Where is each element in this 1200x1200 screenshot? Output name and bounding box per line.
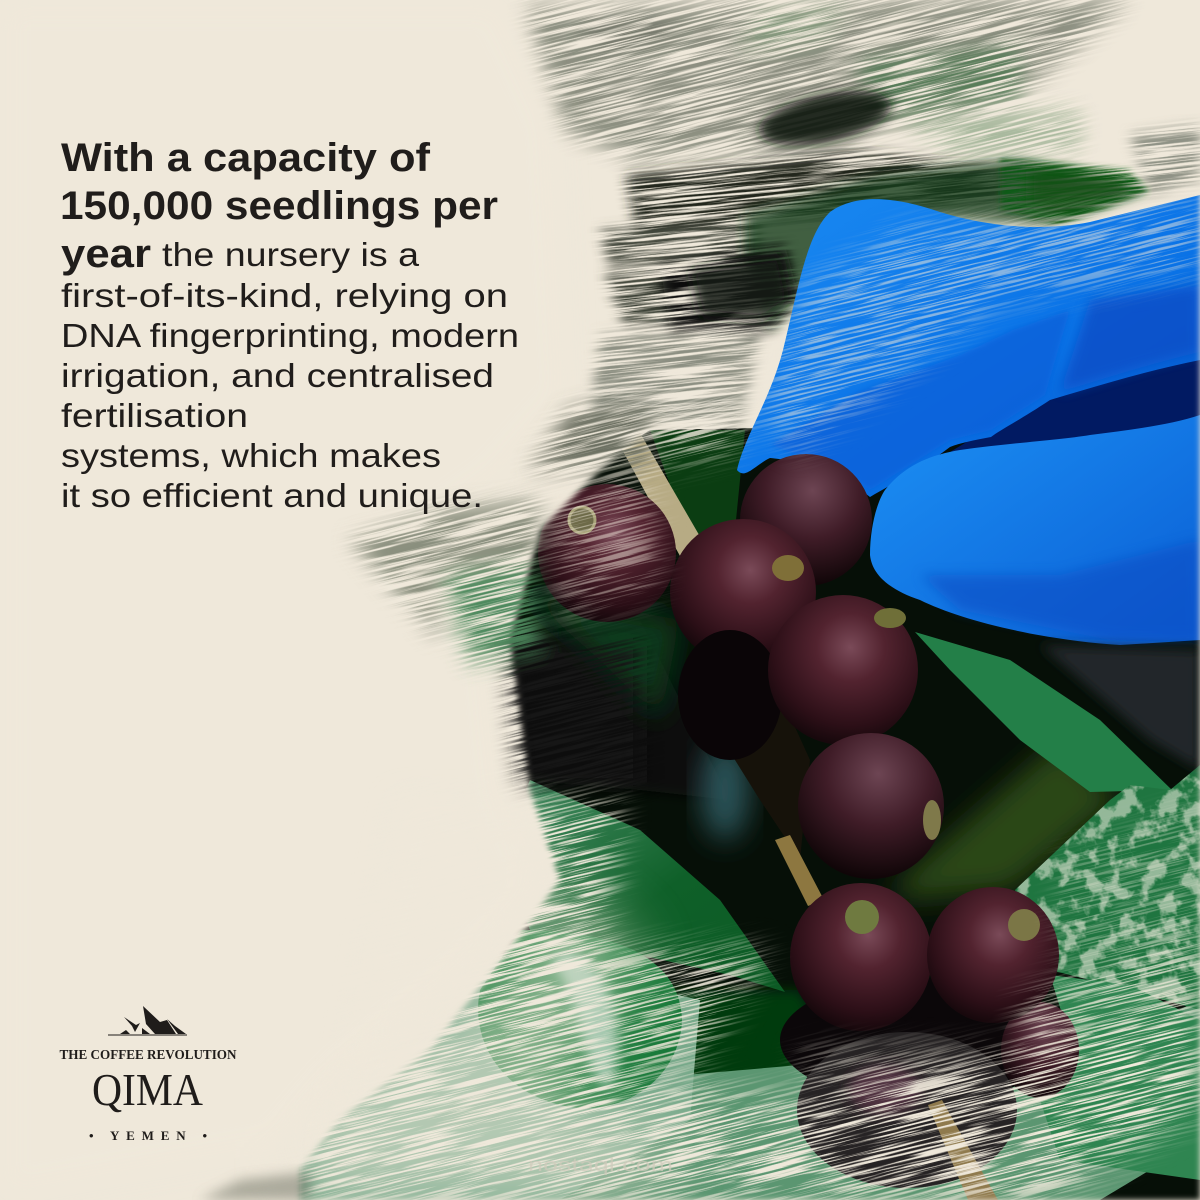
leaf mottling	[1015, 765, 1200, 1010]
icon: mountains	[108, 1006, 187, 1036]
berry 8	[927, 887, 1059, 1023]
pencil strokes: upper dark band	[590, 125, 1200, 430]
tan stem middle	[775, 835, 824, 906]
paragraph line 6: systems, which makes	[61, 437, 441, 474]
glove: lower shadow	[920, 540, 1200, 640]
leaf: lower right	[1040, 975, 1200, 1180]
pale green lower-left	[300, 950, 700, 1200]
leaf: right large	[1015, 765, 1200, 1010]
lower dark green	[674, 986, 806, 1074]
deep green bokeh	[520, 590, 680, 720]
berry 5	[798, 733, 944, 879]
glove: navy shadow gap	[950, 360, 1200, 452]
black smudge underlay	[690, 255, 790, 320]
berry 4 scar	[874, 608, 906, 628]
dark berry stem	[734, 712, 810, 854]
photo panel	[280, 195, 1200, 1200]
logo	[60, 1006, 237, 1143]
berry hidden dark	[678, 630, 782, 760]
berries	[538, 454, 1079, 1188]
heading line 1: With a capacity of	[61, 136, 431, 180]
berry 9 highlight	[849, 1066, 921, 1114]
berry dark cluster shadow	[780, 978, 1060, 1102]
paragraph line 1: the nursery is a	[162, 236, 420, 273]
strong green patch	[1000, 158, 1148, 225]
paragraph line 7: it so efficient and unique.	[61, 477, 483, 514]
berry 3 scar	[772, 555, 804, 581]
berry 7	[790, 883, 932, 1031]
green background right	[900, 740, 1120, 900]
bottom light-green area	[280, 1000, 1200, 1200]
logo name: QIMA	[92, 1064, 203, 1115]
paragraph line 4: irrigation, and centralised	[61, 357, 494, 394]
cream body streak fading bottom-left	[330, 800, 620, 1160]
heading line 3: year	[61, 232, 151, 276]
paragraph line 2: first-of-its-kind, relying on	[61, 277, 508, 314]
berry 5 scar	[923, 800, 941, 840]
left cream fade	[0, 0, 570, 1200]
glove: fold	[770, 310, 1070, 490]
photo dark base lower	[501, 428, 1200, 1200]
heading line 2: 150,000 seedlings per	[60, 184, 498, 228]
green patch underlay	[1030, 170, 1130, 215]
pencil strokes: top grey scribble	[525, 0, 1130, 160]
logo tagline: THE COFFEE REVOLUTION	[60, 1047, 237, 1062]
body text	[60, 136, 519, 514]
blue-grey bokeh	[701, 740, 749, 840]
berry 2	[740, 454, 872, 586]
blurred dark shadow upper	[753, 80, 897, 156]
dark green glow	[650, 430, 745, 540]
tan stem upper	[622, 434, 698, 556]
bottom-left stroke patch	[200, 1172, 310, 1200]
berry 3	[670, 519, 816, 665]
cream streaks on berries and glove	[540, 200, 1200, 620]
leaf: left large leaf	[500, 780, 785, 992]
berry 1 scar	[569, 507, 595, 533]
cream streaks over photo	[300, 800, 1200, 1200]
logo country: • YEMEN •	[89, 1128, 207, 1143]
leaf: rounded lower-left	[478, 930, 682, 1108]
berry 6	[1001, 1002, 1079, 1098]
highlight on rounded leaf	[550, 950, 618, 1090]
black smudge beside glove	[660, 245, 800, 330]
glove: dark right	[1060, 285, 1200, 392]
paragraph line 5: fertilisation	[61, 397, 248, 434]
watermark: nostaql.com	[528, 1155, 673, 1175]
dark green behind glove	[745, 160, 1150, 330]
wash: pale lower-left	[300, 880, 680, 1200]
berry 7 scar	[845, 900, 879, 934]
berry 9 lower dark	[797, 1032, 1017, 1188]
berry 1	[538, 484, 676, 622]
pencil strokes: green upper mid	[860, 45, 1080, 160]
leaf: right slender	[915, 632, 1172, 792]
dark area below glove	[1040, 645, 1200, 770]
glove: upper finger	[737, 195, 1200, 497]
tan stem lower	[928, 1100, 998, 1200]
left dark mass	[500, 620, 730, 800]
grey strokes fading into the cream, left of photo	[350, 400, 650, 785]
glove: lower finger	[870, 415, 1200, 645]
paragraph line 3: DNA fingerprinting, modern	[61, 317, 519, 354]
berry 8 scar	[1008, 909, 1040, 941]
berry 4	[768, 595, 918, 745]
